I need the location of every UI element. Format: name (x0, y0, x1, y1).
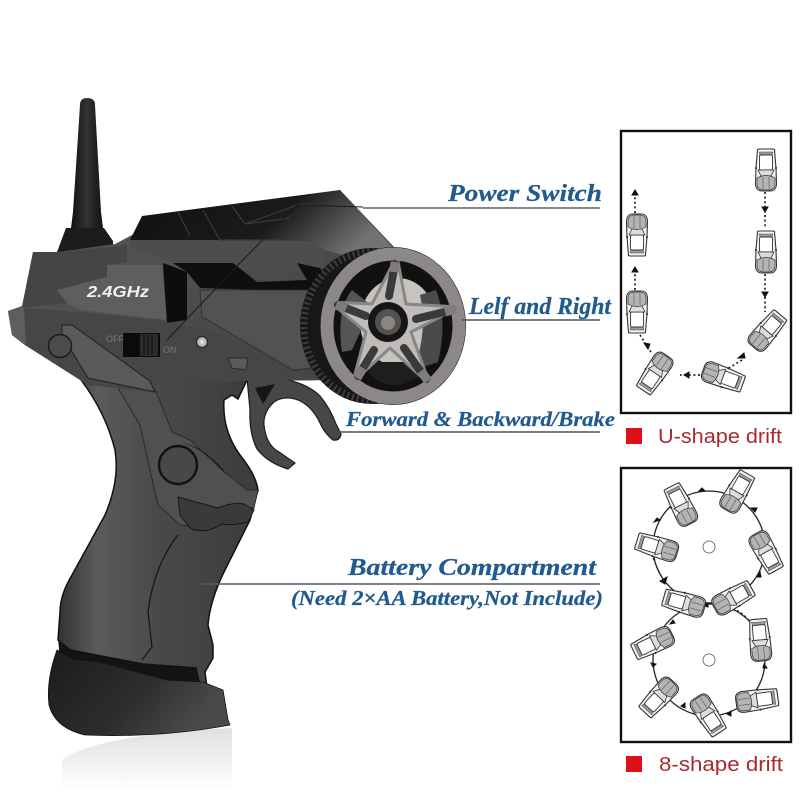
8-shape cars (629, 468, 786, 739)
panel: U-shape drift (621, 131, 791, 413)
spokes (330, 256, 459, 385)
leader: switch to label (167, 205, 363, 340)
side pivot (48, 334, 72, 358)
hub (368, 302, 408, 342)
top cover (130, 190, 395, 262)
U-shape track (632, 190, 768, 378)
callout: battery compartment (200, 555, 603, 610)
8-shape track (651, 488, 767, 716)
callout: battery compartment: Battery Compartment (347, 555, 598, 581)
grip (58, 376, 258, 688)
grip upper band (112, 376, 258, 528)
legend: U-shape drift: U-shape drift (658, 426, 782, 448)
frequency label: 2.4GHz (86, 284, 149, 301)
legend: 8-shape drift: 8-shape drift (659, 754, 783, 776)
steering wheel (300, 247, 466, 405)
power switch (106, 333, 208, 357)
power switch: ON (163, 345, 176, 355)
reflection under controller (62, 728, 232, 790)
lower deck (8, 308, 335, 392)
antenna (57, 98, 113, 252)
tyre (300, 248, 444, 404)
base plate (48, 650, 230, 736)
grip swoosh (178, 497, 254, 531)
black inlay (163, 263, 187, 323)
base gap shadow (58, 638, 200, 684)
right side panel (200, 290, 318, 370)
frequency plate (57, 265, 167, 320)
callout: forward and backward: Forward & Backward/Brake (345, 407, 615, 431)
panel: 8-shape drift (621, 468, 791, 742)
rim (320, 247, 466, 405)
callout: power switch: Power Switch (447, 181, 602, 207)
main body (8, 190, 395, 392)
callout: left and right: Lelf and Right (468, 294, 612, 320)
side bracket (62, 325, 155, 392)
grip side panel seam (142, 535, 178, 660)
left nose (22, 245, 127, 308)
trigger (247, 378, 341, 469)
controller photo (8, 98, 466, 736)
callout: battery compartment: (Need 2×AA Battery,Not Include) (291, 586, 603, 610)
switch labels: OFF (106, 334, 124, 344)
grip pivot button (159, 446, 197, 484)
U-shape cars (626, 149, 789, 397)
